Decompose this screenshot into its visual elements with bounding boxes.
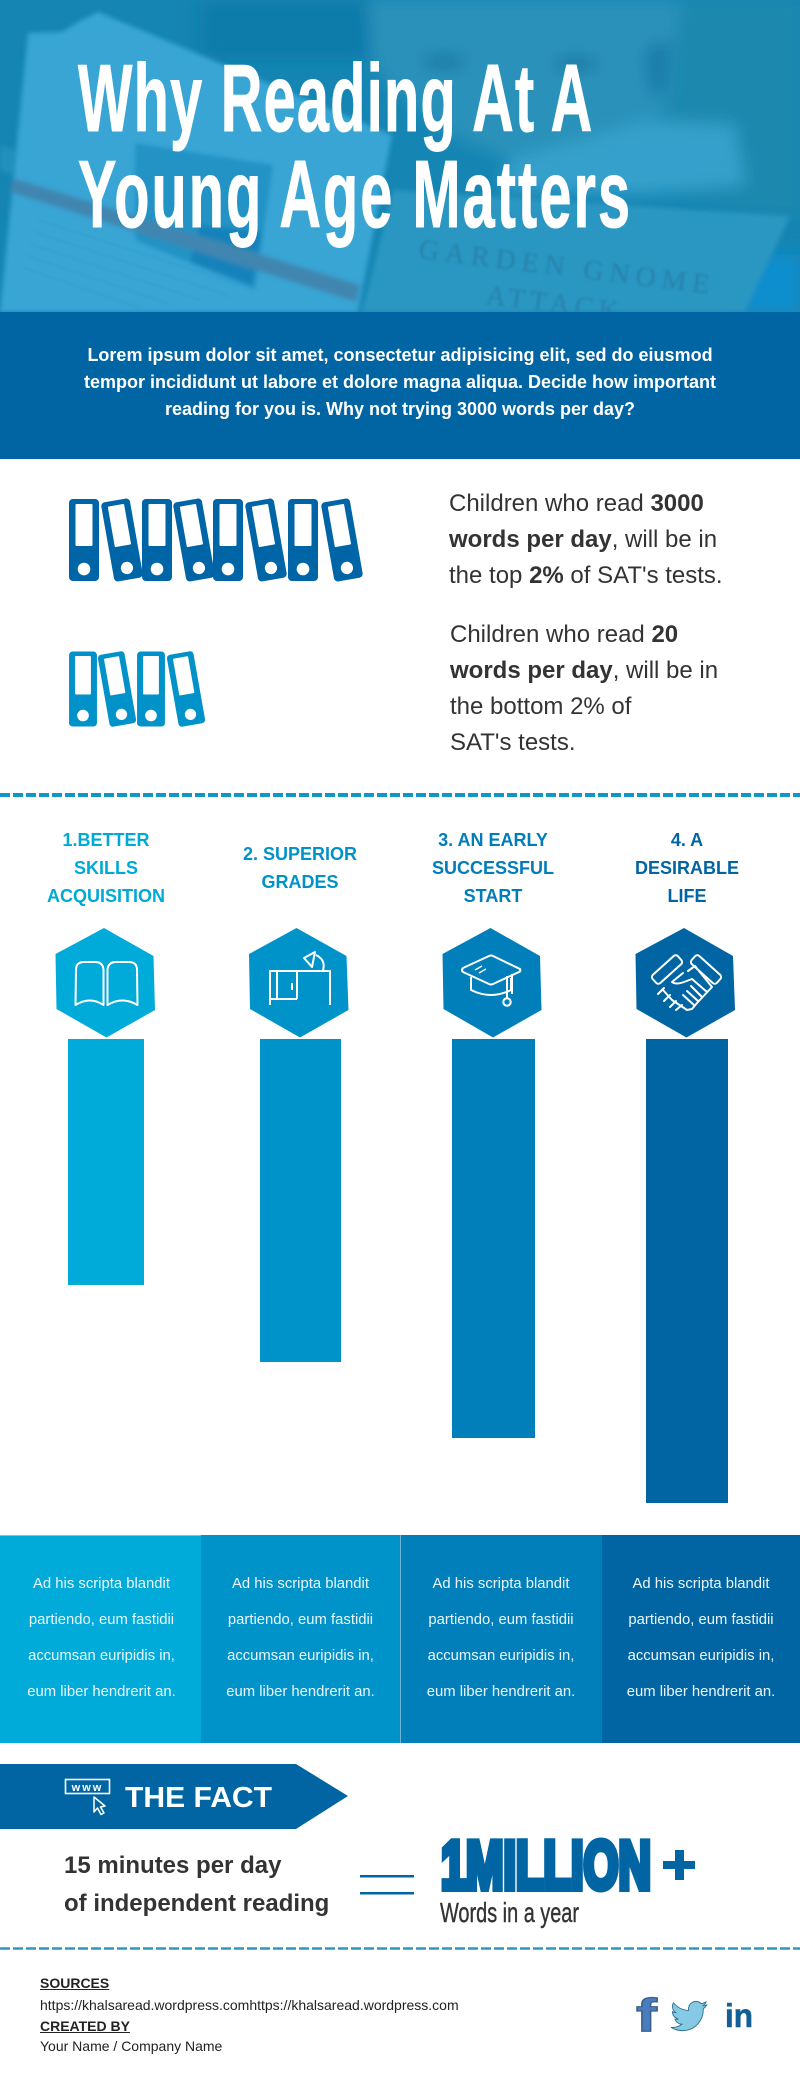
bar 1	[68, 1039, 144, 1285]
heading: life: 4. A	[671, 830, 703, 850]
panel: text 3: Ad his scripta blandit	[433, 1576, 569, 1592]
panel: text 1: Ad his scripta blandit	[33, 1576, 170, 1592]
sources heading: SOURCES	[40, 1975, 109, 1991]
icon: graduation cap hexagon	[442, 928, 542, 1038]
header photo with title: GARDEN GNOME	[417, 234, 717, 301]
title: Young Age Matters	[78, 140, 630, 248]
panel: text 4	[602, 1535, 800, 1743]
panel: text 3	[400, 1535, 602, 1743]
panel: text 2: eum liber hendrerit an.	[226, 1684, 375, 1700]
equals sign	[360, 1875, 414, 1894]
panel: text 1: accumsan euripidis in,	[28, 1648, 175, 1664]
icon: linkedin: in	[725, 1997, 753, 2034]
heading: skills: SKILLS	[74, 858, 138, 878]
heading: grades	[243, 844, 357, 892]
stat: 20 words: SAT's tests.	[450, 729, 576, 756]
heading: skills: ACQUISITION	[47, 886, 165, 906]
panel: text 2: Ad his scripta blandit	[232, 1576, 369, 1592]
heading: life: LIFE	[668, 886, 706, 906]
icon: handshake hexagon	[636, 928, 735, 1038]
icon: eight binders	[69, 498, 363, 582]
icon: four binders	[69, 651, 205, 727]
heading: start	[432, 830, 554, 906]
icon: www cursor: www	[71, 1782, 103, 1794]
panel: text 4: eum liber hendrerit an.	[627, 1684, 775, 1700]
stat: 20 words: words per day, will be in	[450, 657, 718, 684]
label: the fact: THE FACT	[125, 1782, 272, 1814]
panel: text 2: partiendo, eum fastidii	[228, 1612, 373, 1628]
the fact arrow banner	[0, 1764, 348, 1829]
text: 15 minutes: 15 minutes per day	[64, 1852, 281, 1879]
panel: text 4: accumsan euripidis in,	[628, 1648, 774, 1664]
dashed divider	[0, 1947, 800, 1950]
sources link: https://khalsaread.wordpress.comhttps://khalsaread.wordpress.com	[40, 1997, 459, 2013]
panel: text 3: accumsan euripidis in,	[428, 1648, 574, 1664]
icon: desk hexagon	[249, 928, 348, 1038]
intro band	[0, 312, 800, 459]
stat: 3000 words: Children who read 3000	[449, 490, 704, 517]
stat: 20 words: the bottom 2% of	[450, 693, 631, 720]
one million words: Words in a year	[440, 1897, 579, 1928]
panel: text 1: partiendo, eum fastidii	[29, 1612, 174, 1628]
text: 15 minutes	[64, 1852, 329, 1917]
panel: text 4: Ad his scripta blandit	[633, 1576, 769, 1592]
stat: 3000 words	[449, 490, 723, 589]
icon: book hexagon	[56, 928, 155, 1038]
stat: 20 words: Children who read 20	[450, 621, 678, 648]
stat: 20 words	[450, 621, 718, 756]
icon: twitter	[671, 2001, 707, 2031]
intro band: Lorem ipsum dolor sit amet, consectetur adipisicing elit, sed do eiusmod	[87, 345, 713, 365]
panel: text 2	[201, 1535, 400, 1743]
heading: start: SUCCESSFUL	[432, 858, 554, 878]
title: Why Reading At A	[78, 44, 592, 152]
panel: text 3: eum liber hendrerit an.	[427, 1684, 575, 1700]
intro band: reading for you is. Why not trying 3000 words per day?	[165, 399, 635, 419]
panel: text 1: eum liber hendrerit an.	[27, 1684, 176, 1700]
panel: text 2: accumsan euripidis in,	[227, 1648, 374, 1664]
bar 2	[260, 1039, 341, 1362]
heading: start: START	[464, 886, 522, 906]
stat: 3000 words: the top 2% of SAT's tests.	[449, 562, 723, 589]
heading: life	[635, 830, 739, 906]
social icons	[636, 1990, 753, 2040]
heading: skills	[47, 830, 165, 906]
heading: life: DESIRABLE	[635, 858, 739, 878]
created by heading: CREATED BY	[40, 2018, 130, 2034]
heading: start: 3. AN EARLY	[438, 830, 548, 850]
panel: text 3: partiendo, eum fastidii	[428, 1612, 574, 1628]
bar 4	[646, 1039, 728, 1503]
intro band: tempor incididunt ut labore et dolore magna aliqua. Decide how important	[84, 372, 716, 392]
dashed divider	[0, 793, 800, 797]
bar 3	[452, 1039, 535, 1438]
column chart with hexagon icons	[56, 928, 735, 1503]
header photo with title	[0, 0, 800, 312]
icon: www cursor	[66, 1780, 110, 1814]
text: 15 minutes: of independent reading	[64, 1890, 329, 1917]
panel: text 1	[0, 1535, 203, 1743]
created by name: Your Name / Company Name	[40, 2038, 222, 2054]
heading: skills: 1.BETTER	[62, 830, 150, 850]
stat: 3000 words: words per day, will be in	[449, 526, 717, 553]
heading: grades: 2. SUPERIOR	[243, 844, 357, 864]
panel: text 4: partiendo, eum fastidii	[628, 1612, 774, 1628]
heading: grades: GRADES	[261, 872, 338, 892]
title	[78, 44, 630, 248]
